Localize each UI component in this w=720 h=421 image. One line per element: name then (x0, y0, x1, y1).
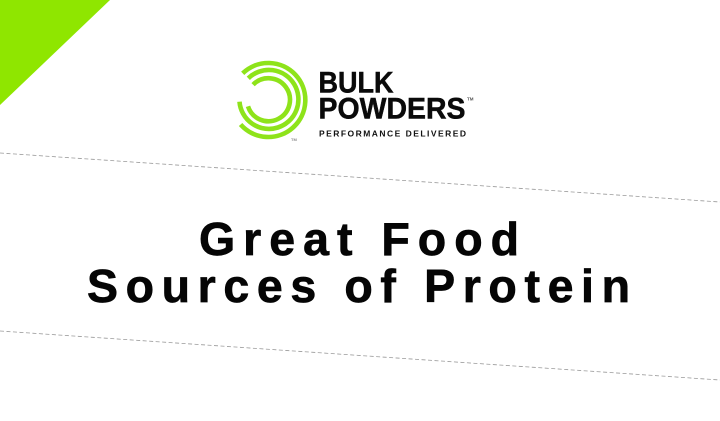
logo trademark: TM (467, 96, 474, 102)
icon: concentric rings (240, 63, 305, 137)
logo (240, 63, 474, 142)
logo wordmark: BULK (318, 66, 394, 100)
green corner triangle (0, 0, 110, 105)
title line 1: Great Food (199, 213, 519, 265)
logo tagline: PERFORMANCE DELIVERED (319, 128, 466, 138)
icon trademark: TM (291, 137, 297, 142)
title line 2: Sources of Protein (87, 260, 630, 312)
title (87, 213, 630, 312)
logo: POWDERS (318, 92, 466, 126)
